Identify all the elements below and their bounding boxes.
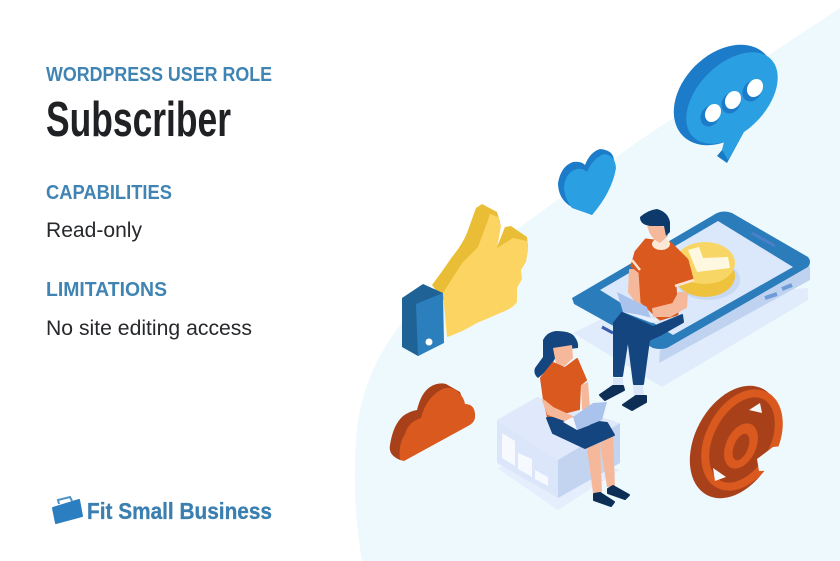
icon: coin with check: [675, 242, 740, 300]
icon: speech bubble: [654, 25, 795, 165]
icon: heart: [558, 149, 616, 215]
logo: Fit Small Business: [87, 498, 272, 524]
title: Subscriber: [46, 93, 231, 147]
capabilities heading: CAPABILITIES: [46, 182, 172, 204]
person: woman with laptop: [534, 331, 629, 506]
person: man with laptop: [600, 209, 694, 410]
eyebrow heading: WORDPRESS USER ROLE: [46, 64, 272, 86]
icon: cloud: [390, 383, 475, 461]
capabilities text: Read-only: [46, 219, 142, 242]
limitations text: No site editing access: [46, 317, 252, 340]
limitations heading: LIMITATIONS: [46, 279, 167, 301]
icon: at sign: [672, 370, 798, 514]
seat: box: [497, 397, 620, 510]
icon: thumbs up: [402, 204, 528, 356]
icon: smartphone illustration: [572, 212, 810, 387]
